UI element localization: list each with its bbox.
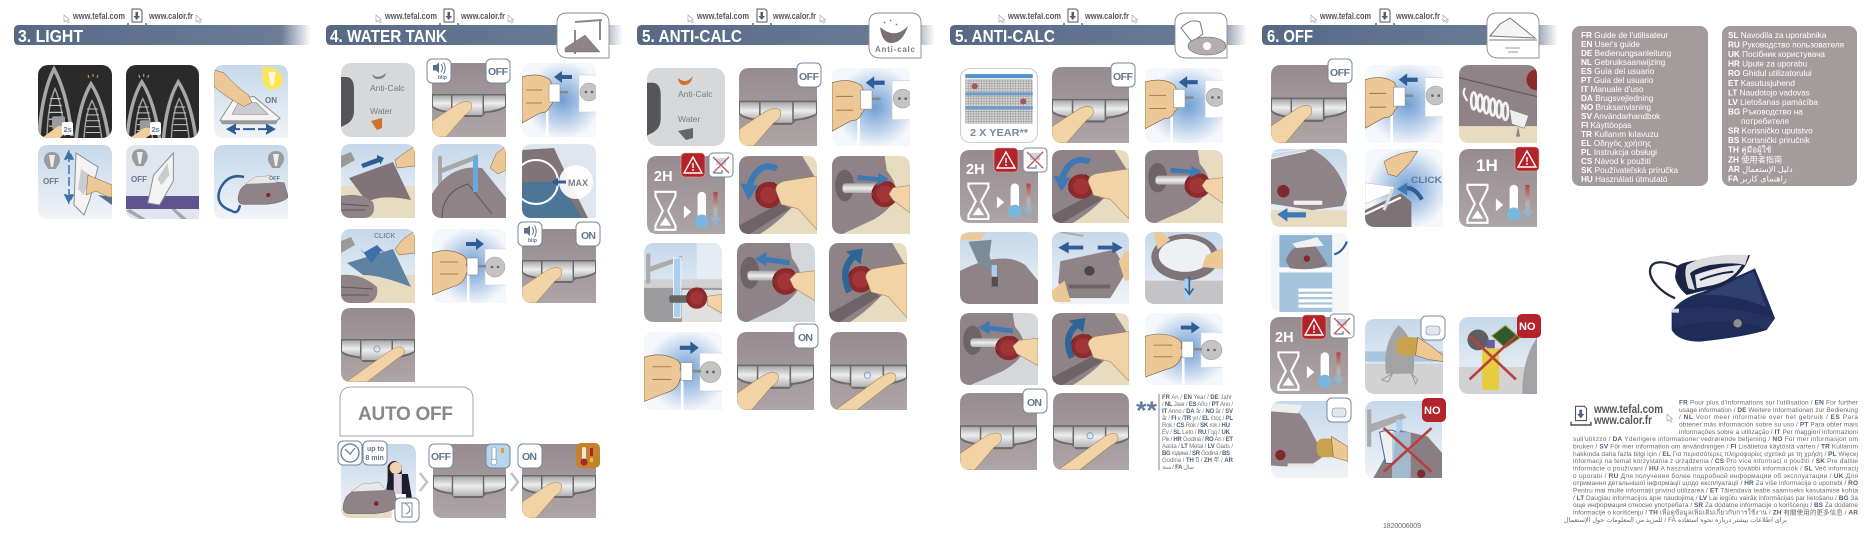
heading: 6. OFF: 6. OFF bbox=[1267, 26, 1313, 46]
step: empty over sink bbox=[1145, 232, 1223, 304]
step: wipe soleplate bbox=[1365, 316, 1445, 394]
footnote: year translations: Rok / CS Rok / SK rok / HU bbox=[1162, 423, 1230, 429]
step: water indicator: Water bbox=[370, 106, 393, 116]
panel: user guide languages right: BS Korisnički priručnik bbox=[1728, 136, 1811, 145]
panel: user guide languages right bbox=[1722, 26, 1857, 186]
text block: translations of further info: obtener más información sobre su uso / PT Para obter mais bbox=[1679, 422, 1859, 428]
step: wait up to 8 min: up to bbox=[367, 446, 384, 453]
footnote: year translations bbox=[1136, 394, 1234, 471]
footnote: year translations: / NL Jaar / ES Año / PT Ano / bbox=[1162, 402, 1233, 408]
step: unplug bbox=[832, 68, 913, 146]
step: press on: ON bbox=[1027, 397, 1042, 409]
step: pull rod out bbox=[1145, 150, 1223, 223]
panel: website and multilingual note bbox=[1564, 400, 1859, 524]
step: plug in bbox=[432, 229, 507, 304]
website row: www.calor.fr bbox=[1084, 11, 1129, 21]
step: fill tank from faucet bbox=[432, 144, 506, 218]
panel: user guide languages right: TH คู่มือผู้ใช้ bbox=[1728, 145, 1772, 156]
footnote: year translations: FR An / EN Year / DE Jahr bbox=[1162, 395, 1232, 401]
panel: user guide languages right: RU Руководство пользователя bbox=[1728, 41, 1844, 50]
panel: user guide languages left: IT Manuale d'uso bbox=[1581, 85, 1644, 94]
panel: section 4 water tank bbox=[326, 9, 623, 522]
step: twice a year calendar: 2 X YEAR** bbox=[970, 128, 1028, 139]
panel: user guide languages left: FI Käyttöopas bbox=[1581, 121, 1632, 130]
step: pour water in bbox=[960, 232, 1038, 304]
heading: 5. ANTI-CALC: 5. ANTI-CALC bbox=[955, 26, 1055, 46]
step: wait 1 hour: 1H bbox=[1476, 156, 1498, 175]
panel: user guide languages left: DA Brugsvejledning bbox=[1581, 94, 1654, 103]
panel: user guide languages left: EN User's guide bbox=[1581, 40, 1640, 49]
website addresses: www.calor.fr bbox=[1593, 415, 1652, 427]
step: plug in bbox=[1145, 313, 1224, 386]
step: press on with blip bbox=[518, 222, 600, 303]
text block: translations of further info: bruken / SV För mer information om användningen / FI Lisätietoa käytöstä varten / TR Kullanım bbox=[1573, 444, 1858, 450]
panel: user guide languages right: ET Kasutusjuhend bbox=[1728, 79, 1795, 88]
text block: translations of further info: sull'utilizzo / DA Yderligere informationer vedrørende betjening / NO For mer informasjon om bbox=[1573, 436, 1858, 443]
panel: user guide languages right: AR دليل الإستعمال bbox=[1728, 165, 1793, 175]
website row: www.tefal.com bbox=[72, 11, 125, 21]
step: water indicator bbox=[341, 63, 415, 137]
panel: user guide languages left: PT Guia del usuario bbox=[1581, 76, 1654, 85]
document code: 1820006009 bbox=[1383, 523, 1421, 530]
panel: user guide languages right: HR Upute za uporabu bbox=[1728, 60, 1808, 69]
website row: www.calor.fr bbox=[148, 11, 193, 21]
step: press 2s light on: 2s bbox=[64, 125, 72, 134]
panel: user guide languages left: ES Guía del usuario bbox=[1581, 67, 1655, 76]
panel: user guide languages right: RO Ghidul utilizatorului bbox=[1728, 69, 1812, 78]
step: press 2s light on bbox=[38, 65, 112, 141]
website row bbox=[1311, 9, 1448, 26]
step: press ok bbox=[341, 308, 415, 382]
panel: user guide languages left: NL Gebruiksaanwijzing bbox=[1581, 58, 1666, 67]
step: press off: OFF bbox=[799, 71, 820, 83]
text block: translations of further info: usage information / DE Weitere Informationen zur Bedienung bbox=[1679, 407, 1858, 414]
step: wait 2 hours bbox=[1270, 314, 1354, 394]
panel: section 5 anti-calc first bbox=[637, 9, 935, 411]
step: auto off cold bbox=[429, 444, 510, 518]
step: press on bbox=[960, 389, 1047, 470]
footnote: year translations: IT Anno / DA år / NO år / SV bbox=[1162, 408, 1233, 415]
text block: translations of further info: Pentru mai multe informații privind utilizarea / ET Täiendava teabe saamiseks kasutamise kohta bbox=[1573, 488, 1858, 494]
panel: user guide languages left bbox=[1572, 26, 1708, 186]
text block: translations of further info: отримання детальнішої інформації щодо експлуатації / HR Za više informacija o upotrebi / RO bbox=[1573, 479, 1858, 487]
text block: translations of further info: برای اطلاعات بیشتر درباره نحوه استفاده FA / للمزيد من المعلومات حول الإستعمال bbox=[1564, 517, 1787, 524]
heading: 4. WATER TANK: 4. WATER TANK bbox=[330, 26, 447, 46]
step: wait 2 hours cool: 2H bbox=[966, 162, 985, 178]
footnote: year translations: Godina / TH ปี / ZH 年 / AR bbox=[1162, 456, 1234, 464]
footnote: year translations: سنة / FA سال bbox=[1162, 464, 1194, 471]
panel: user guide languages right: UK Посібник користувача bbox=[1728, 50, 1825, 59]
step: iron upright light off bbox=[38, 145, 112, 219]
step: shake base bbox=[1052, 232, 1129, 304]
text block: translations of further info: FR Pour plus d'informations sur l'utilisation / EN For further bbox=[1679, 400, 1859, 406]
step: press off: OFF bbox=[1330, 67, 1351, 79]
step: wait 2 hours cool bbox=[647, 153, 733, 234]
step: unplug bbox=[1365, 65, 1446, 143]
step: no abrasive products: NO bbox=[1519, 321, 1536, 333]
step: on after auto off bbox=[518, 443, 600, 518]
heading: 3. LIGHT bbox=[14, 25, 311, 46]
panel: user guide languages left: SV Användarhandbok bbox=[1581, 112, 1661, 121]
step: no abrasive products bbox=[1459, 314, 1541, 394]
website row: www.tefal.com bbox=[1319, 11, 1371, 21]
step: anti-calc indicator: Water bbox=[678, 114, 701, 124]
step: press 2s light off: 2s bbox=[152, 125, 160, 134]
step: wait 2 hours: 2H bbox=[1275, 330, 1294, 346]
website row bbox=[999, 9, 1138, 26]
step: wait 2 hours cool: 2H bbox=[654, 169, 673, 185]
website row: www.calor.fr bbox=[460, 11, 505, 21]
panel: user guide languages right: LT Naudotojo vadovas bbox=[1728, 88, 1810, 97]
website row: www.tefal.com bbox=[1007, 11, 1061, 21]
text block: translations of further info: informacije o korišćenju / TH เพื่อดูข้อมูลเพิ่มเติมเกี่ยวกับการใช้งาน / ZH 有關使用的更多信息 / AR bbox=[1573, 508, 1858, 516]
step: iron on board light off bbox=[126, 145, 199, 219]
heading: 5. ANTI-CALC bbox=[637, 25, 935, 46]
panel: section 5 anti-calc second bbox=[950, 9, 1247, 471]
panel: user guide languages right: потребителя bbox=[1741, 117, 1789, 126]
panel: user guide languages left: DE Bedienungsanleitung bbox=[1581, 49, 1672, 58]
step: on after auto off: ON bbox=[522, 451, 537, 463]
step: base with cord light off: OFF bbox=[269, 176, 281, 182]
step: unplug bbox=[522, 63, 599, 137]
step: unscrew knob bbox=[1052, 150, 1129, 223]
panel: user guide languages left: CS Návod k použití bbox=[1581, 157, 1652, 166]
panel: user guide languages right: BG Ръководство на bbox=[1728, 108, 1803, 116]
step: press on with blip: ON bbox=[581, 230, 596, 242]
website addresses: www.tefal.com bbox=[1593, 404, 1663, 416]
step: store on shelf bbox=[1271, 233, 1349, 312]
panel: user guide languages left: EL Οδηγός χρήσης bbox=[1581, 139, 1651, 148]
panel: section 3 light bbox=[14, 9, 311, 219]
step: no washing under tap: NO bbox=[1424, 405, 1441, 417]
heading: 4. WATER TANK bbox=[326, 25, 623, 46]
step: iron on board light off: OFF bbox=[131, 175, 147, 184]
text block: translations of further info: informacji na temat korzystania z urządzenia / CS Pro více informací o použití / SK Pre ďalšie bbox=[1573, 458, 1858, 465]
website row: www.calor.fr bbox=[1395, 11, 1440, 21]
step: press 2s light off bbox=[126, 65, 199, 139]
panel: user guide languages right: FA راهنمای کاربر bbox=[1728, 174, 1787, 183]
step: base with cord light off bbox=[214, 145, 288, 219]
website row: www.tefal.com bbox=[696, 11, 749, 21]
step: anti-calc indicator bbox=[647, 68, 725, 146]
step: auto off cold: OFF bbox=[431, 451, 452, 463]
step: twice a year calendar bbox=[961, 69, 1037, 142]
heading: 5. ANTI-CALC: 5. ANTI-CALC bbox=[642, 26, 742, 46]
step: remove tank bbox=[341, 144, 415, 218]
panel: user guide languages left: SK Používateľská príručka bbox=[1581, 166, 1678, 175]
text block: translations of further info: o uporabi / RU Для получения более подробной информации об эксплуатации / UK Для bbox=[1573, 472, 1858, 480]
step: pull rod out bbox=[832, 156, 910, 234]
step: press off bbox=[1052, 63, 1135, 143]
panel: user guide languages right: ZH 使用者指南 bbox=[1728, 154, 1782, 164]
step: slide tray bbox=[1271, 149, 1347, 227]
icon: anti-calc collector bbox=[869, 13, 921, 58]
step: click tank back bbox=[341, 229, 415, 303]
step: press on with blip: blip bbox=[528, 238, 537, 244]
arrow: chevron bbox=[420, 473, 427, 491]
step: press off with blip: blip bbox=[438, 75, 447, 81]
auto off label: AUTO OFF bbox=[358, 404, 453, 425]
panel: user guide languages left: PL Instrukcja obsługi bbox=[1581, 148, 1657, 157]
footnote: year translations: år / FI v /TR yıl / EL έτος / PL bbox=[1162, 415, 1233, 422]
step: fill to max: MAX bbox=[568, 178, 588, 188]
footnote: year translations: BG година / SR Godina / BS bbox=[1162, 451, 1230, 457]
panel: section 6 off bbox=[1262, 9, 1558, 530]
arrow: chevron bbox=[511, 473, 518, 491]
step: iron moving light on bbox=[214, 65, 288, 138]
step: press off: OFF bbox=[1113, 71, 1134, 83]
icon: download bbox=[1571, 406, 1591, 425]
panel: user guide languages left: TR Kullanım kılavuzu bbox=[1581, 130, 1659, 139]
step: wait up to 8 min bbox=[338, 441, 419, 522]
step: press off with blip: OFF bbox=[488, 66, 509, 78]
text block: translations of further info bbox=[1564, 400, 1859, 524]
heading: 6. OFF bbox=[1262, 25, 1558, 46]
step: press off with blip bbox=[427, 59, 510, 137]
footnote: year translations: Aasta / LT Metai / LV Gads / bbox=[1162, 444, 1233, 450]
step: tighten knob bbox=[829, 243, 907, 322]
text block: translations of further info: / NL Voor meer informatie over het gebruik / ES Para bbox=[1679, 414, 1858, 421]
step: insert rod bbox=[960, 313, 1038, 385]
website row bbox=[64, 9, 202, 26]
step: press on bbox=[737, 324, 818, 410]
step: coil cord bbox=[1459, 65, 1548, 143]
step: tighten knob bbox=[1052, 313, 1129, 385]
panel: user guide languages right: SR Korisničko uputstvo bbox=[1728, 127, 1813, 136]
text block: translations of further info: hakkında daha fazla bilgi için / EL Για περισσότερες πληροφορίες σχετικά με τη χρήση / PL Więcej bbox=[1573, 450, 1858, 458]
step: no washing under tap bbox=[1365, 398, 1446, 478]
step: rinse rod bbox=[644, 243, 722, 322]
step: wait 1 hour bbox=[1459, 147, 1539, 227]
icon: pouring water into base bbox=[1175, 13, 1227, 58]
step: wait 2 hours cool bbox=[960, 148, 1047, 223]
text block: translations of further info: / LT Daugiau informacijos apie naudojimą / LV Lai iegūtu vairāk informācijas par lietošanu / BG За bbox=[1573, 495, 1858, 502]
footnote: year translations: Év / SL Leto / RU Год / UK bbox=[1162, 429, 1231, 436]
website row: www.tefal.com bbox=[384, 11, 437, 21]
step: click iron: CLICK bbox=[1411, 175, 1443, 185]
text block: translations of further info: informácie o používaní / HU A használatra vonatkozó további információk / SL Več informacij bbox=[1573, 466, 1858, 472]
step: insert rod bbox=[737, 243, 815, 322]
step: press off bbox=[739, 63, 821, 146]
text block: translations of further info: informações sobre a utilização / IT Per maggiori informazioni bbox=[1679, 429, 1858, 436]
product photo: steam generator iron bbox=[1650, 255, 1775, 342]
step: iron upright light off: OFF bbox=[43, 177, 59, 186]
icon: anti-calc collector: Anti-calc bbox=[875, 45, 916, 54]
panel: user guide languages right: LV Lietošanas pamācība bbox=[1728, 98, 1818, 107]
step: unplug bbox=[1145, 68, 1226, 143]
step: water indicator: Anti-Calc bbox=[370, 83, 405, 93]
step: anti-calc indicator: Anti-Calc bbox=[678, 89, 713, 99]
panel: user guide languages left: HU Használati útmutató bbox=[1581, 175, 1668, 184]
step: fill to max bbox=[514, 144, 596, 218]
step: wipe base bbox=[1271, 398, 1351, 478]
step: iron moving light on: ON bbox=[265, 96, 277, 105]
step: unscrew knob bbox=[739, 156, 817, 234]
auto off label bbox=[340, 387, 473, 436]
footnote: year translations: ** bbox=[1136, 397, 1157, 425]
step: click iron bbox=[1365, 149, 1443, 227]
step: press ok bbox=[830, 332, 907, 410]
step: press on: ON bbox=[798, 332, 813, 344]
step: wait up to 8 min: 8 min bbox=[366, 455, 384, 462]
website row: www.calor.fr bbox=[772, 11, 816, 21]
text block: translations of further info: още информация относно употребата / SR Za dodatne informacije o korišćenju / BS Za dodatne bbox=[1573, 501, 1858, 509]
heading: 3. LIGHT: 3. LIGHT bbox=[18, 26, 83, 46]
website addresses bbox=[1593, 404, 1672, 427]
icon: iron on base bbox=[1487, 13, 1539, 58]
step: press off bbox=[1271, 59, 1352, 143]
heading: 5. ANTI-CALC bbox=[950, 25, 1247, 46]
step: plug in bbox=[644, 332, 723, 411]
panel: user guide languages left: NO Bruksanvisning bbox=[1581, 103, 1652, 112]
website row bbox=[376, 9, 514, 26]
panel: user guide languages left: FR Guide de l'utilisateur bbox=[1581, 31, 1668, 40]
footnote: year translations: Рік / HR Godina / RO An / ET bbox=[1162, 437, 1233, 443]
step: click tank back: CLICK bbox=[374, 233, 395, 240]
panel: user guide languages right: SL Navodila za uporabnika bbox=[1728, 31, 1827, 40]
website row bbox=[688, 9, 826, 26]
icon: faucet filling tank bbox=[557, 13, 609, 58]
step: press ok bbox=[1053, 393, 1129, 470]
